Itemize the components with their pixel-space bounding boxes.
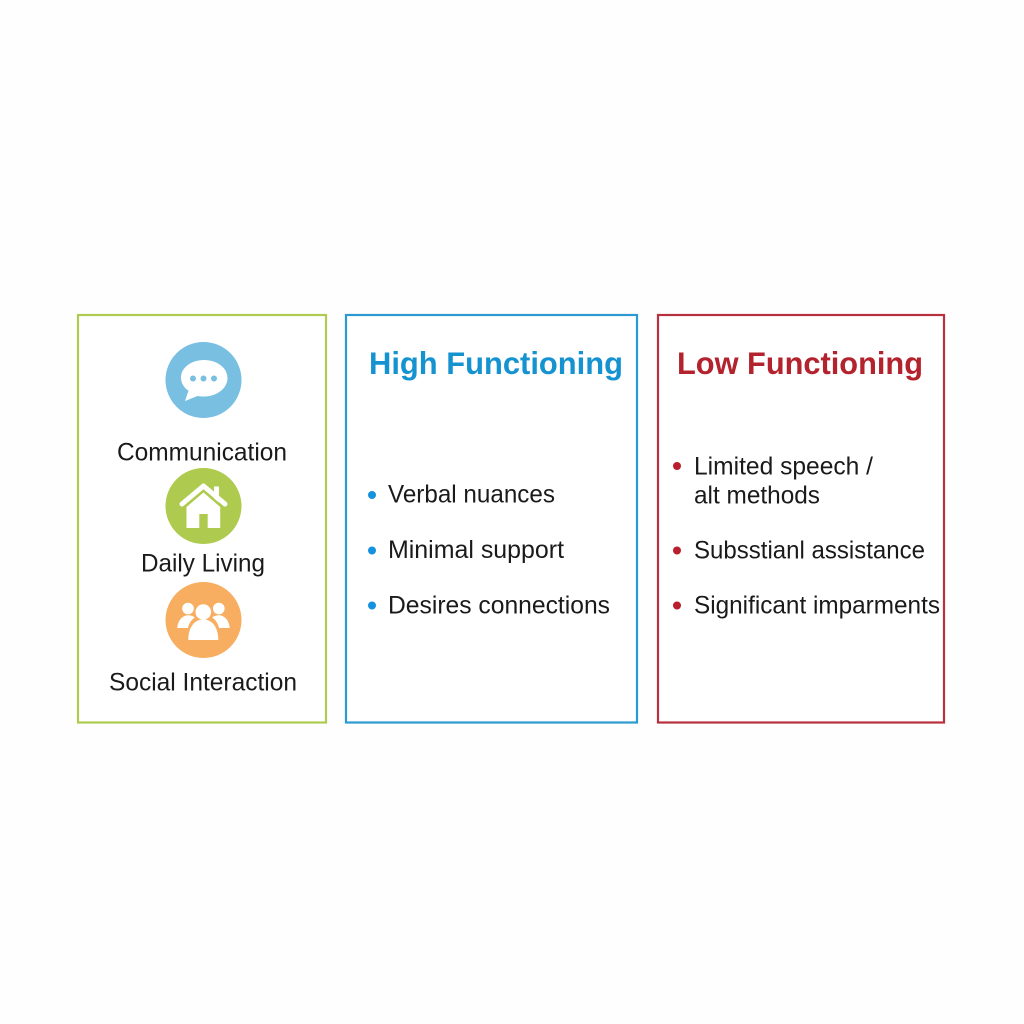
label: communication: Communication bbox=[117, 438, 287, 466]
panel: domains bbox=[78, 315, 326, 722]
list item: limited speech: alt methods bbox=[694, 482, 820, 510]
label: social interaction: Social Interaction bbox=[109, 668, 297, 696]
list item: substantial assistance: Subsstianl assistance bbox=[694, 536, 925, 564]
heading: low functioning: Low Functioning bbox=[677, 345, 923, 381]
list item: minimal support: Minimal support bbox=[388, 536, 564, 564]
list item: limited speech: Limited speech / bbox=[694, 452, 873, 480]
heading: high functioning: High Functioning bbox=[369, 345, 623, 381]
panel: low functioning bbox=[658, 315, 944, 722]
list item: limited speech bbox=[673, 452, 873, 510]
label: daily living: Daily Living bbox=[141, 550, 265, 578]
list item: desires connections: Desires connections bbox=[388, 592, 610, 620]
icon: social interaction group bbox=[166, 582, 242, 658]
list item: significant impairments: Significant imparments bbox=[694, 592, 940, 620]
panel: high functioning bbox=[346, 315, 637, 722]
list item: verbal nuances: Verbal nuances bbox=[388, 480, 555, 508]
icon: communication speech bubble bbox=[166, 342, 242, 418]
icon: daily living house bbox=[166, 468, 242, 544]
